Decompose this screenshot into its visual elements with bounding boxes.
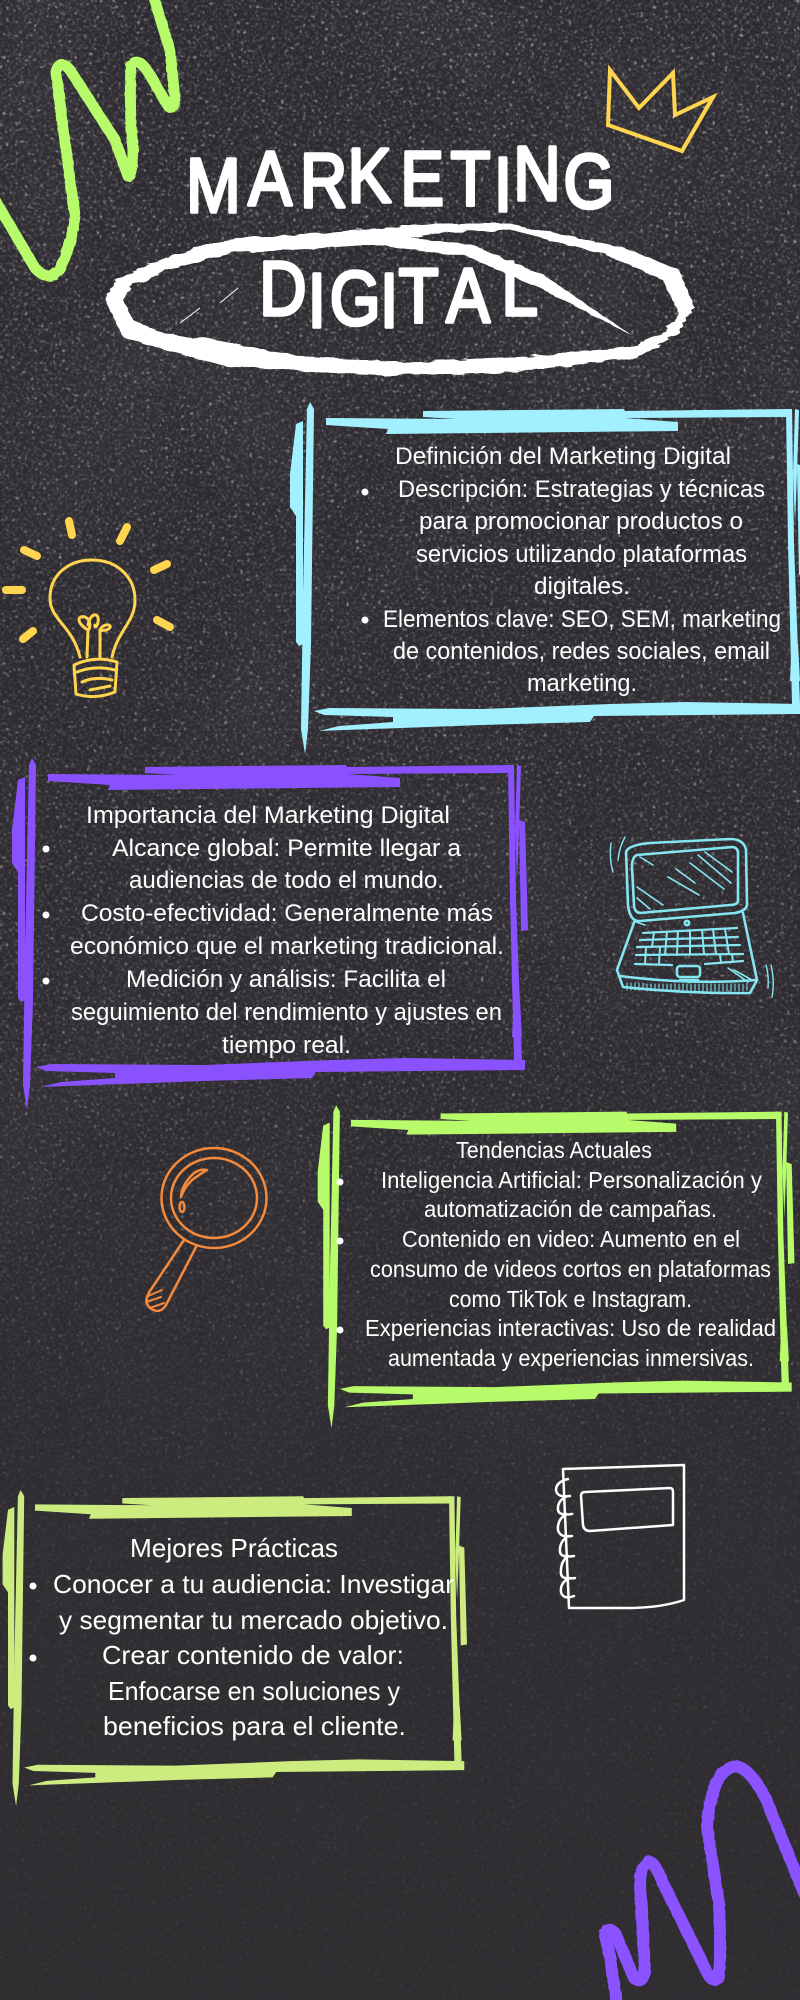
bullet list: Inteligencia Artificial: Personalización y: [381, 1167, 762, 1193]
bullet list: beneficios para el cliente.: [103, 1711, 406, 1741]
bullet list: para promocionar productos o: [419, 508, 743, 535]
light green brush frame: [3, 1490, 467, 1806]
title word: DIGITAL: DIGITAL: [259, 246, 538, 344]
bullet list: consumo de videos cortos en plataformas: [370, 1256, 771, 1282]
panel: mejores prácticas: [3, 1490, 467, 1806]
purple brush frame: [12, 758, 528, 1110]
icon: white spiral notebook: [556, 1465, 684, 1608]
bullet list: Costo-efectividad: Generalmente más: [81, 900, 493, 927]
panel heading: Importancia del Marketing Digital: [86, 802, 450, 829]
icon: yellow crown: [608, 70, 713, 151]
bullet list: Medición y análisis: Facilita el: [126, 966, 446, 993]
bullet list: Contenido en video: Aumento en el: [402, 1226, 740, 1252]
panel heading: Tendencias Actuales: [456, 1137, 652, 1163]
icon: yellow light bulb: [6, 521, 170, 697]
decorative squiggle: purple, bottom right: [605, 1767, 800, 2000]
bullet list: económico que el marketing tradicional.: [70, 933, 504, 960]
title: marketing digital: [105, 131, 694, 375]
bullet list: digitales.: [534, 573, 630, 600]
bullet list: Conocer a tu audiencia: Investigar: [53, 1569, 454, 1599]
bullet list: marketing.: [527, 670, 637, 697]
bullet list: Elementos clave: SEO, SEM, marketing: [383, 606, 781, 633]
panel heading: Mejores Prácticas: [130, 1533, 338, 1563]
bullet list: aumentada y experiencias inmersivas.: [388, 1345, 754, 1371]
bullet list: como TikTok e Instagram.: [449, 1286, 692, 1312]
bullet list: [42, 835, 504, 1059]
cyan brush frame: [290, 402, 800, 754]
bullet list: Descripción: Estrategias y técnicas: [398, 476, 765, 503]
panel heading: Definición del Marketing Digital: [395, 443, 731, 470]
bullet list: Alcance global: Permite llegar a: [112, 835, 462, 862]
panel: importancia del marketing digital: [12, 758, 528, 1110]
bullet list: Crear contenido de valor:: [102, 1640, 404, 1670]
bullet list: seguimiento del rendimiento y ajustes en: [71, 999, 502, 1026]
bullet list: tiempo real.: [222, 1032, 351, 1059]
title word: MARKETING: MARKETING: [186, 131, 614, 229]
bullet list: de contenidos, redes sociales, email: [393, 638, 770, 665]
panel: definición del marketing digital: [290, 402, 800, 754]
bullet list: [336, 1167, 776, 1371]
bullet list: [30, 1569, 454, 1741]
bullet list: Experiencias interactivas: Uso de realidad: [365, 1315, 776, 1341]
bullet list: [362, 476, 781, 697]
decorative squiggle: green, top left: [0, 0, 175, 276]
green brush frame: [318, 1105, 794, 1428]
bullet list: audiencias de todo el mundo.: [129, 867, 444, 894]
panel: tendencias actuales: [318, 1105, 794, 1428]
bullet list: y segmentar tu mercado objetivo.: [59, 1605, 448, 1635]
icon: cyan laptop: [610, 837, 773, 997]
hand-drawn ellipse around DIGITAL: [105, 224, 694, 375]
bullet list: Enfocarse en soluciones y: [108, 1676, 400, 1706]
bullet list: automatización de campañas.: [424, 1196, 717, 1222]
chalk scratches: [180, 288, 238, 323]
icon: orange magnifying glass: [146, 1148, 266, 1311]
bullet list: servicios utilizando plataformas: [416, 541, 747, 568]
